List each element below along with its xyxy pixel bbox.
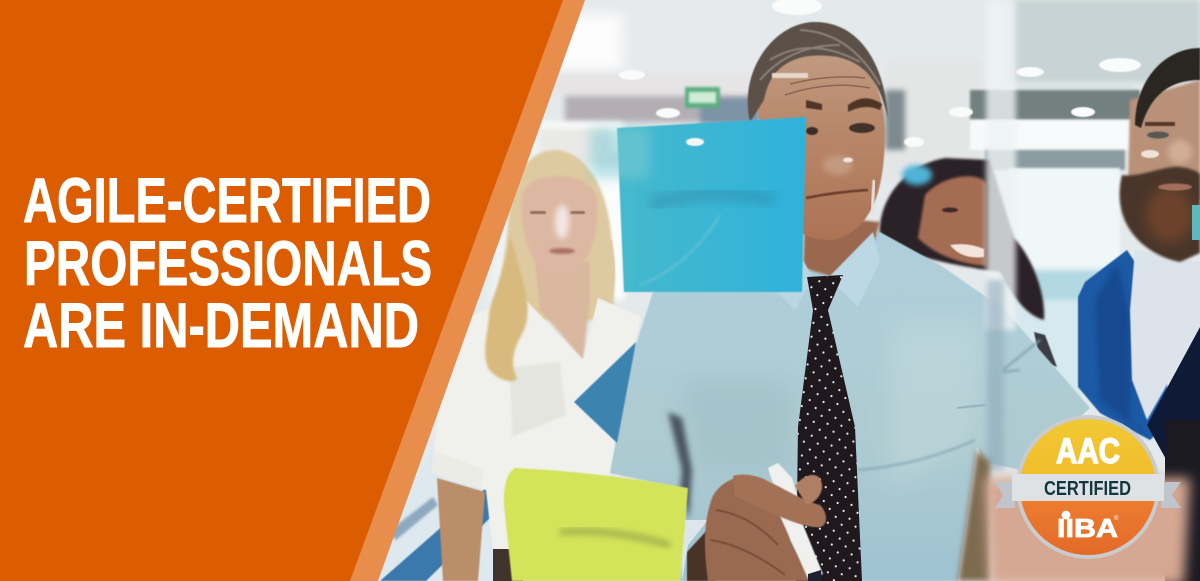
face xyxy=(918,176,986,266)
marker barrel xyxy=(780,510,823,581)
shirt collar xyxy=(777,232,880,310)
striped floor xyxy=(375,450,500,581)
yellow-green sticky note xyxy=(504,468,688,581)
facial features xyxy=(530,205,585,254)
ribbon tails xyxy=(995,482,1181,508)
title xyxy=(23,166,432,361)
light blue shirt xyxy=(610,232,1090,581)
badge ring xyxy=(1016,415,1160,559)
facial features xyxy=(1141,122,1192,164)
eye xyxy=(942,208,958,212)
glass wall reflection strip xyxy=(986,0,1016,470)
white shirt xyxy=(1130,250,1200,420)
neck xyxy=(535,262,590,360)
hand xyxy=(705,475,826,581)
face xyxy=(521,176,598,277)
IIBA logo text: IIBA xyxy=(1057,513,1118,543)
woman on left xyxy=(431,150,641,581)
forehead wrinkles and glare xyxy=(772,73,870,95)
blue diamond note xyxy=(574,342,636,443)
pink sticky note xyxy=(985,478,1190,581)
rolled cuff xyxy=(431,450,484,488)
smile xyxy=(950,244,984,258)
white blouse xyxy=(432,296,641,560)
blue sticky note xyxy=(590,117,806,292)
dark suit behind badge xyxy=(1165,420,1200,581)
title line 2: PROFESSIONALS xyxy=(24,229,432,299)
armpit shadow xyxy=(668,412,692,520)
woman on right xyxy=(880,158,1057,367)
brown background patch xyxy=(958,450,990,581)
back hair xyxy=(490,150,614,320)
badge: AAC certified IIBA xyxy=(995,415,1181,559)
translucent diagonal stripe xyxy=(345,0,585,581)
polka dot tie xyxy=(796,275,862,581)
man on right xyxy=(1078,48,1200,581)
dark hair xyxy=(880,158,1044,320)
finger creases xyxy=(710,510,785,575)
head xyxy=(755,54,885,240)
shoulder strap xyxy=(1034,332,1057,367)
office ceiling background xyxy=(380,0,1200,581)
main man xyxy=(610,22,1090,581)
hair xyxy=(1135,48,1200,128)
IIBA logo text: ® xyxy=(1114,515,1119,522)
blue suit xyxy=(1078,250,1170,440)
cyan reflection xyxy=(1192,205,1200,240)
neck xyxy=(803,215,880,276)
dark lapel xyxy=(1147,327,1200,581)
sleeve seam xyxy=(487,375,489,490)
hair xyxy=(748,22,888,122)
dark trousers xyxy=(493,549,523,581)
nose and mouth xyxy=(806,155,874,215)
face xyxy=(1128,80,1200,200)
exit sign xyxy=(685,87,720,108)
thumb xyxy=(795,475,822,504)
marker tip xyxy=(808,570,822,581)
photo: office team at glass wall xyxy=(375,0,1200,581)
ribbon xyxy=(1012,474,1164,501)
title line 3: ARE IN-DEMAND xyxy=(23,291,419,361)
blouse pocket xyxy=(510,362,566,437)
blue reflection xyxy=(902,165,932,185)
lips xyxy=(1158,184,1192,190)
orange panel xyxy=(0,0,563,581)
dark forearm xyxy=(687,527,715,581)
badge lower half xyxy=(1022,501,1154,555)
beard xyxy=(1120,167,1200,262)
title line 1: AGILE-CERTIFIED xyxy=(23,166,431,236)
index finger xyxy=(733,475,826,527)
brow and eye xyxy=(806,98,882,135)
shirt shading xyxy=(680,320,1040,490)
AAC text: AAC xyxy=(1056,432,1120,471)
badge upper half xyxy=(1021,419,1155,474)
front hair strands xyxy=(485,235,528,381)
certified text: CERTIFIED xyxy=(1044,478,1131,500)
marker cap xyxy=(768,463,800,512)
bare arm xyxy=(437,478,485,581)
ceiling lights xyxy=(619,0,1200,147)
white cuff xyxy=(681,520,708,581)
